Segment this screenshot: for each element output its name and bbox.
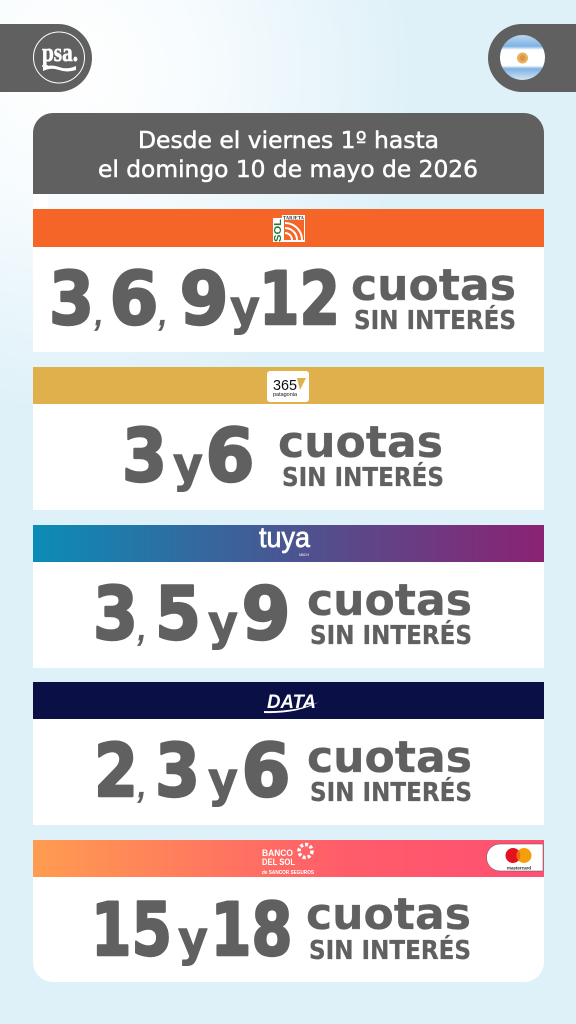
cuotas sin interés label: SIN INTERÉS: [310, 778, 472, 808]
installment numbers: 5: [155, 572, 201, 657]
installment numbers: ,: [158, 286, 169, 335]
icon: Banco del Sol logo: BANCO: [262, 848, 293, 859]
icon: Tuya logo: tuya: [259, 522, 311, 554]
installment numbers: y: [230, 280, 260, 336]
icon: Mastercard badge: [487, 844, 543, 871]
installment numbers: [122, 414, 254, 499]
panel: Tuya: [33, 522, 544, 668]
PSA logo pill: [0, 24, 92, 92]
installment numbers: 12: [259, 257, 340, 342]
installment numbers: [93, 572, 290, 657]
installment numbers: 3: [155, 729, 200, 814]
cuotas sin interés label: [351, 260, 516, 336]
icon: 365 Patagonia logo: 365: [273, 377, 297, 394]
icon: Tarjeta Sol logo: SOL: [273, 219, 284, 242]
icon: Mastercard badge: mastercard: [507, 866, 531, 870]
installment numbers: y: [208, 752, 238, 808]
heading panel: [33, 113, 544, 209]
installment numbers: 2: [94, 729, 138, 814]
installment numbers: 6: [242, 729, 290, 814]
cuotas sin interés label: [307, 575, 472, 651]
panel: Tarjeta Sol: [33, 209, 544, 352]
icon: Argentina flag: [500, 35, 545, 80]
cuotas sin interés label: cuotas: [306, 889, 471, 940]
installment numbers: [49, 257, 340, 342]
cuotas sin interés label: [278, 417, 444, 493]
cuotas sin interés label: [306, 889, 471, 966]
cuotas sin interés label: cuotas: [351, 260, 516, 311]
installment numbers: 9: [180, 257, 228, 342]
Argentina flag pill: [488, 24, 576, 92]
installment numbers: ,: [137, 601, 148, 650]
cuotas sin interés label: SIN INTERÉS: [354, 306, 516, 336]
cuotas sin interés label: cuotas: [307, 575, 472, 626]
installment numbers: 18: [210, 888, 292, 973]
installment numbers: ,: [137, 758, 148, 807]
installment numbers: 9: [242, 572, 290, 657]
installment numbers: y: [178, 911, 208, 967]
icon: Tarjeta Sol logo: [273, 215, 305, 242]
icon: 365 Patagonia logo: [267, 371, 309, 402]
installment numbers: [94, 729, 290, 814]
icon: Banco del Sol logo: de SANCOR SEGUROS: [262, 870, 315, 876]
icon: 365 Patagonia logo: patagonia: [273, 392, 298, 398]
panel: Banco del Sol: [33, 840, 544, 982]
icon: Banco del Sol logo: [262, 844, 315, 876]
heading text: [98, 128, 478, 183]
heading text: el domingo 10 de mayo de 2026: [98, 157, 478, 183]
installment numbers: 6: [110, 257, 158, 342]
cuotas sin interés label: cuotas: [278, 417, 443, 468]
installment numbers: [91, 888, 292, 973]
installment numbers: y: [208, 595, 238, 651]
panel: 365 Patagonia: [33, 367, 544, 510]
installment numbers: 3: [93, 572, 138, 657]
installment numbers: ,: [94, 286, 105, 335]
heading text: Desde el viernes 1º hasta: [138, 128, 439, 154]
installment numbers: y: [173, 437, 203, 493]
icon: Data logo: DATA: [267, 692, 316, 713]
installment numbers: 6: [206, 414, 254, 499]
cuotas sin interés label: SIN INTERÉS: [282, 463, 444, 493]
icon: Tarjeta Sol logo: TARJETA: [283, 216, 304, 222]
installment numbers: 15: [91, 888, 172, 973]
panel: Data: [33, 682, 544, 825]
icon: PSA logo: psa.: [42, 38, 78, 67]
icon: Tuya logo: NBCH: [299, 552, 309, 557]
cuotas sin interés label: SIN INTERÉS: [309, 936, 471, 966]
installment numbers: 3: [49, 257, 94, 342]
icon: Banco del Sol logo: DEL SOL: [262, 857, 295, 868]
installment numbers: 3: [122, 414, 167, 499]
cuotas sin interés label: cuotas: [307, 732, 472, 783]
cuotas sin interés label: [307, 732, 472, 808]
cuotas sin interés label: SIN INTERÉS: [310, 621, 472, 651]
